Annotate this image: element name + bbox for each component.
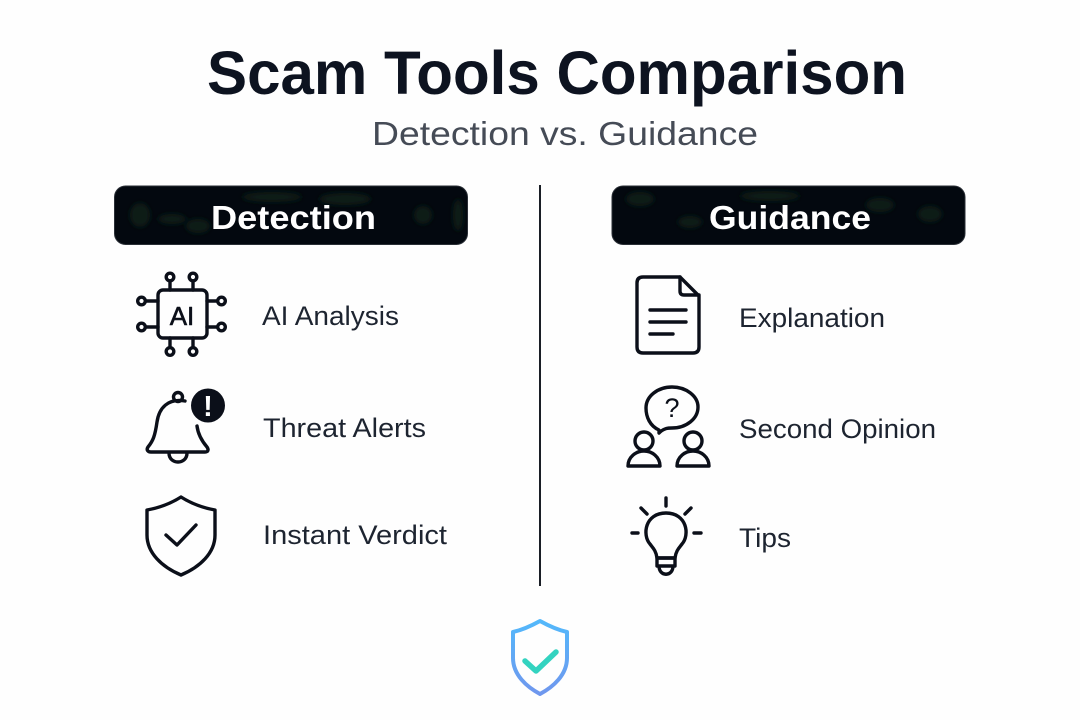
title: Scam Tools Comparison (207, 39, 907, 107)
panel: guidance header: Guidance (709, 199, 871, 236)
icon: document (637, 277, 699, 353)
icon: shield with check (147, 497, 215, 575)
icon: AI chip: AI (170, 301, 194, 331)
icon: blue shield with teal check (513, 621, 567, 694)
icon: two people with question bubble (628, 387, 709, 466)
label: AI Analysis: AI Analysis (262, 301, 399, 331)
icon: two people with question bubble: ? (664, 393, 680, 423)
center divider (539, 185, 541, 586)
panel: detection header: Detection (211, 199, 376, 236)
icon: light bulb (632, 498, 701, 574)
label: Threat Alerts: Threat Alerts (263, 413, 426, 443)
label: Explanation: Explanation (739, 303, 885, 333)
label: Tips: Tips (739, 523, 791, 553)
subtitle: Detection vs. Guidance (372, 115, 758, 152)
panel: guidance header (612, 186, 965, 244)
icon: bell with alert badge (147, 388, 225, 462)
label: Instant Verdict: Instant Verdict (263, 520, 448, 550)
label: Second Opinion: Second Opinion (739, 414, 936, 444)
panel: detection header (114, 186, 468, 244)
icon: AI chip (138, 273, 225, 355)
icon: bell with alert badge: ! (203, 391, 213, 423)
